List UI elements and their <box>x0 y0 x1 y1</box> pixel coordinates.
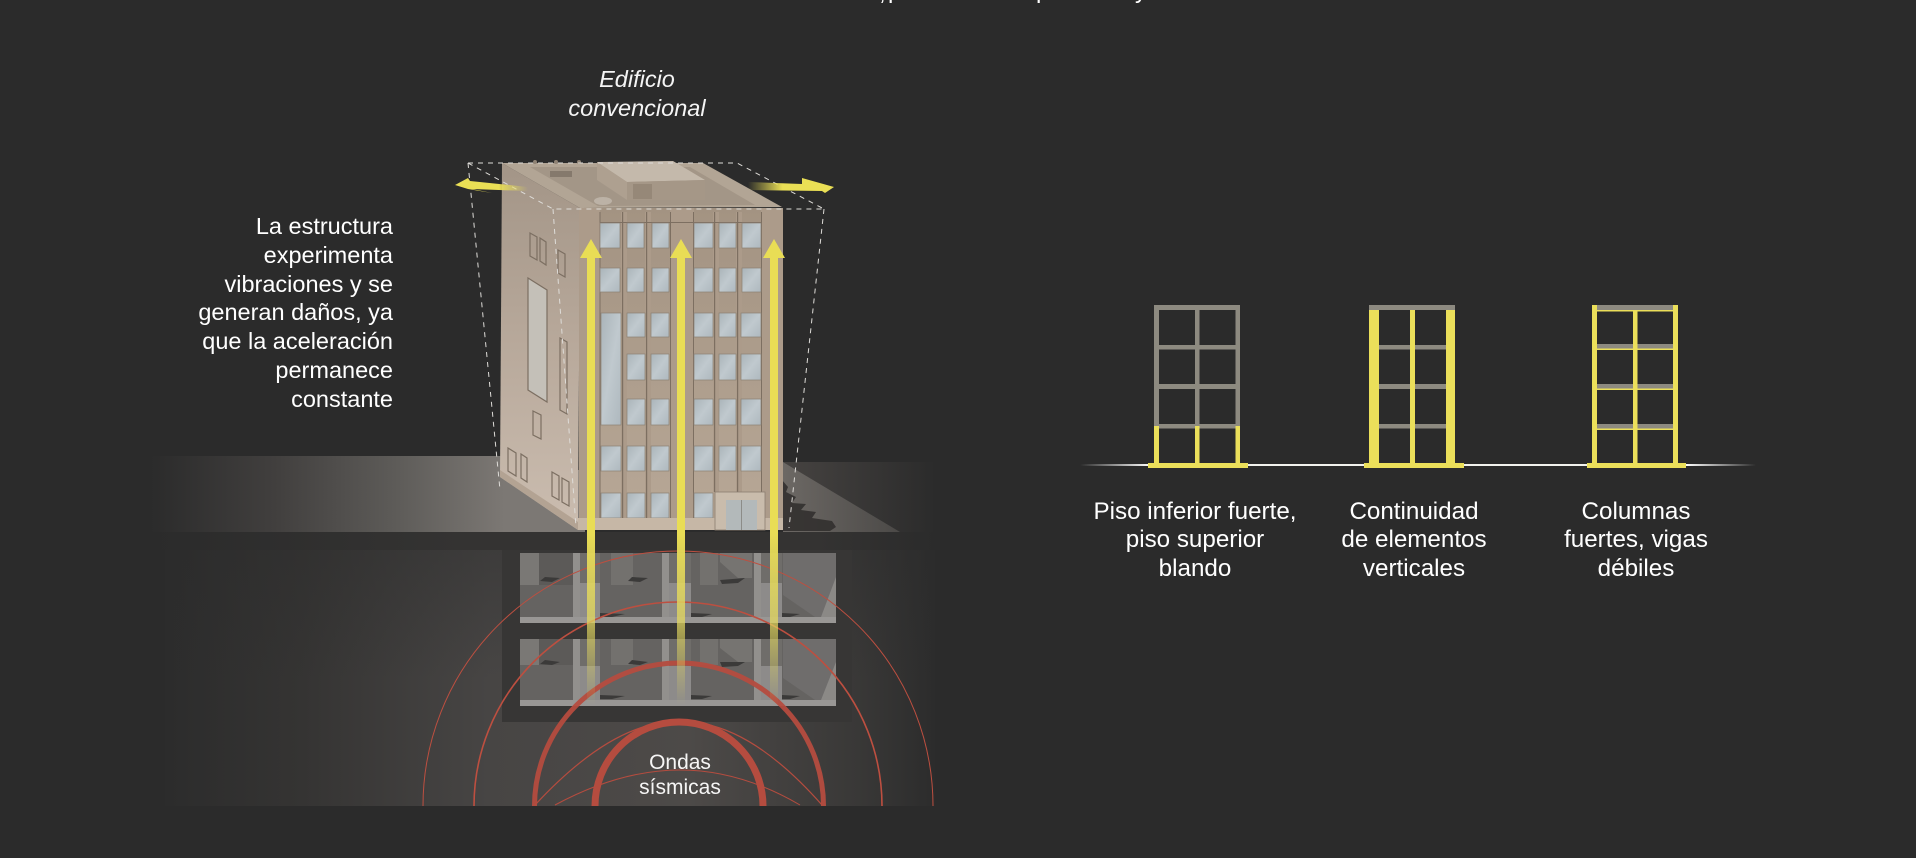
caption: continuity: de elementos <box>1341 526 1487 553</box>
caption: strong lower floor: Piso inferior fuerte, <box>1094 498 1296 525</box>
vertical acceleration arrows <box>580 239 785 705</box>
basement level 2 <box>520 639 836 706</box>
seismic wave rings <box>423 551 933 806</box>
text: structure explanation: vibraciones y se <box>224 271 393 297</box>
caption: continuity: Continuidad <box>1349 498 1479 525</box>
label: Edificio convencional: Edificio <box>599 66 675 92</box>
text: structure explanation: experimenta <box>264 242 394 268</box>
dashed outline of deformed building <box>468 163 824 528</box>
text: structure explanation: que la aceleración <box>202 328 393 354</box>
caption: continuity: verticales <box>1363 555 1465 582</box>
building illustration <box>500 160 783 530</box>
frame: continuity of vertical elements <box>1364 305 1464 468</box>
text: structure explanation: constante <box>291 386 393 412</box>
ground line <box>1080 464 1756 466</box>
frame: strong lower floor <box>1148 305 1248 468</box>
frame: strong columns, weak beams <box>1587 305 1686 468</box>
horizontal movement arrow right <box>748 178 834 193</box>
entrance <box>715 492 765 530</box>
building front facade <box>578 208 783 530</box>
text: structure explanation: La estructura <box>256 213 394 239</box>
arrow right <box>763 239 785 705</box>
clipped heading fragments at top edge <box>879 0 1147 6</box>
caption: strong lower floor: blando <box>1159 555 1231 582</box>
arrow left <box>580 239 602 705</box>
label: Ondas sísmicas: sísmicas <box>639 776 721 799</box>
caption: strong columns: débiles <box>1598 555 1674 582</box>
icon: tree shadow beside building <box>782 480 836 531</box>
caption: strong lower floor: piso superior <box>1126 526 1264 553</box>
facade windows <box>600 223 761 518</box>
building roof <box>502 160 782 208</box>
ground plane and basement section <box>150 456 935 806</box>
horizontal movement arrow left <box>455 178 528 193</box>
arrow centre <box>670 239 692 705</box>
label: Ondas sísmicas: Ondas <box>649 751 711 774</box>
basement level 1 <box>520 553 836 623</box>
caption: strong columns: Columnas <box>1582 498 1690 525</box>
text: structure explanation: generan daños, ya <box>198 299 394 325</box>
text: structure explanation: permanece <box>275 357 393 383</box>
building left face <box>500 163 580 530</box>
caption: strong columns: fuertes, vigas <box>1564 526 1708 553</box>
label: Edificio convencional: convencional <box>568 95 706 121</box>
